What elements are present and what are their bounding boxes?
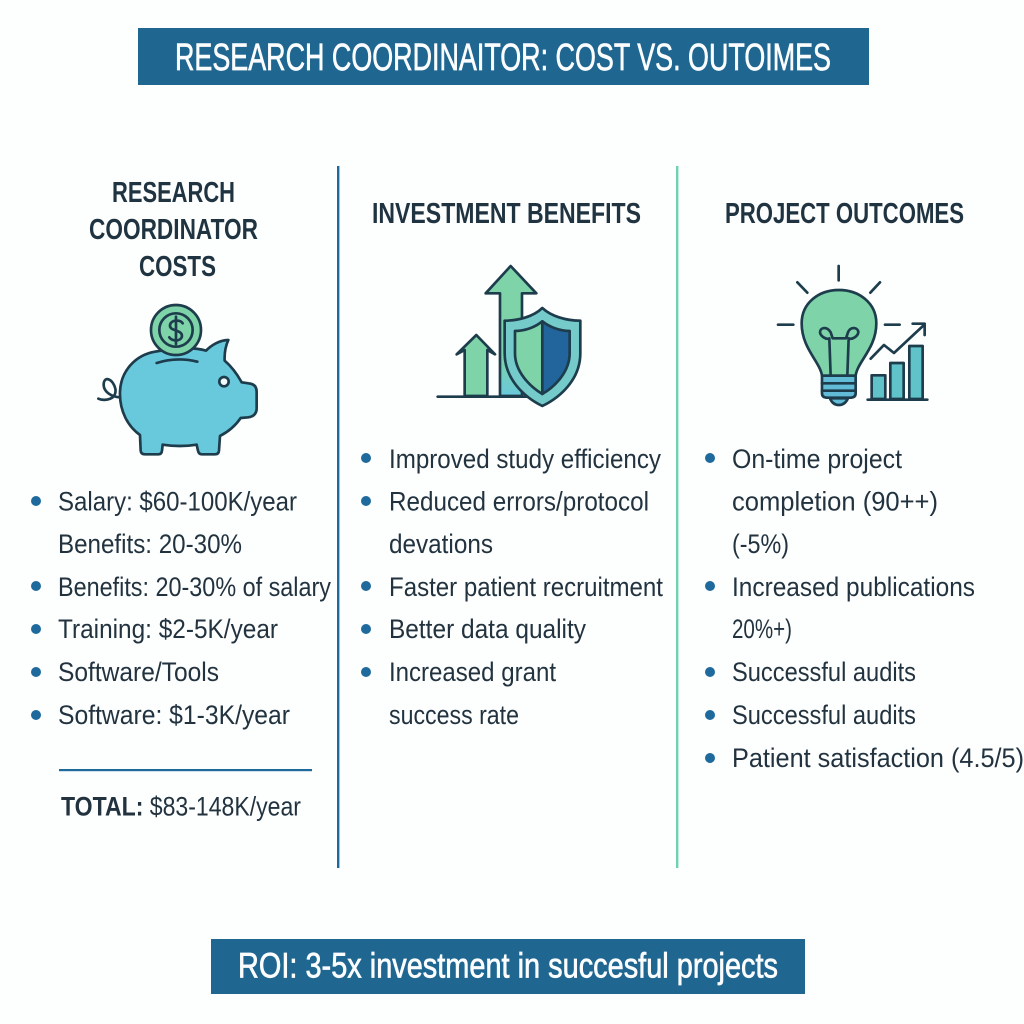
heading: costs: COORDINATOR (89, 214, 258, 246)
heading: costs: COSTS (139, 251, 216, 283)
column divider: green (676, 166, 678, 868)
icon: arrows and shield (438, 266, 580, 406)
list: cost items: Benefits: 20-30% (58, 529, 242, 559)
list: benefit items: Reduced errors/protocol (389, 486, 649, 516)
list: cost items: Salary: $60-100K/year (58, 486, 297, 516)
column divider: blue (337, 166, 339, 868)
list: benefit items: Faster patient recruitment (389, 572, 663, 602)
list: benefit items: Better data quality (389, 614, 586, 644)
list: cost items: Software: $1-3K/year (58, 700, 290, 730)
list: benefit items: success rate (389, 700, 519, 730)
list: outcome items: Successful audits (732, 700, 916, 730)
icon: light bulb and growth chart (778, 266, 927, 405)
list: outcome items: completion (90++) (732, 486, 938, 516)
list: benefit items (361, 444, 663, 730)
list: cost items: Software/Tools (58, 657, 219, 687)
total cost: TOTAL: $83-148K/year (61, 792, 301, 822)
ROI banner: ROI: 3-5x investment in succesful projects (238, 946, 778, 986)
ROI banner (211, 939, 805, 994)
panel: research coordinator costs (31, 177, 331, 822)
list: benefit items: Improved study efficiency (389, 444, 661, 474)
panel: project outcomes (705, 198, 1024, 773)
title banner (138, 28, 869, 85)
list: outcome items: Successful audits (732, 657, 916, 687)
list: outcome items: On-time project (732, 444, 902, 474)
heading: benefits: INVESTMENT BENEFITS (372, 198, 641, 230)
list: outcome items: (-5%) (732, 529, 789, 559)
heading: costs (89, 177, 258, 283)
list: benefit items: Increased grant (389, 657, 556, 687)
list: outcome items (705, 444, 1024, 773)
list: cost items: Benefits: 20-30% of salary (58, 572, 331, 602)
icon: piggy bank with coin (98, 305, 257, 454)
panel: investment benefits (361, 198, 663, 730)
list: benefit items: devations (389, 529, 493, 559)
heading: costs: RESEARCH (112, 177, 235, 209)
total rule (59, 769, 312, 771)
list: outcome items: Increased publications (732, 572, 975, 602)
list: cost items (31, 486, 331, 730)
list: outcome items: 20%+) (732, 614, 792, 644)
list: cost items: Training: $2-5K/year (58, 614, 278, 644)
